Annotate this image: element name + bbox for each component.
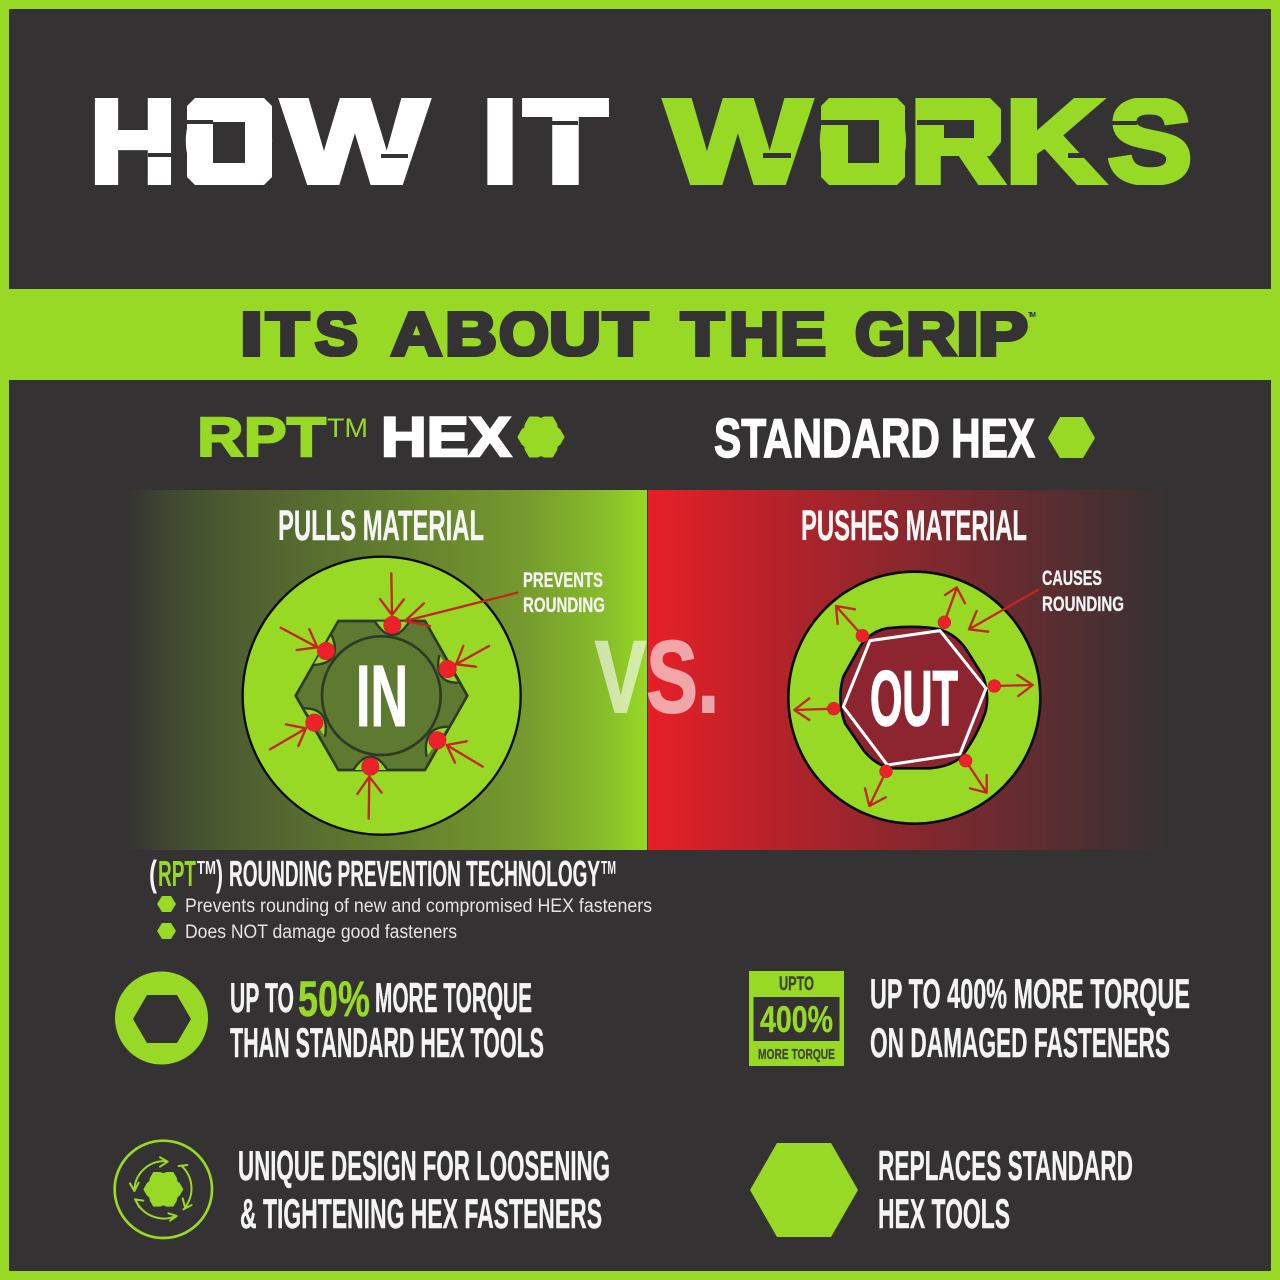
feature: replaces standard hex tools: HEX TOOLS: [878, 1190, 1010, 1237]
band lettering: U: [549, 300, 601, 369]
title white words: W: [283, 76, 428, 208]
band lettering: T: [266, 300, 309, 369]
band lettering: G: [855, 300, 905, 369]
icon: large hexagon: [750, 1143, 858, 1237]
heading: rpt hex: [197, 405, 564, 468]
band lettering: P: [978, 300, 1028, 369]
bullet list: Prevents rounding of new and compromised HEX fasteners: [185, 896, 652, 917]
icon: 400 percent badge: [749, 971, 844, 1066]
band: its about the grip: TM: [1028, 312, 1036, 319]
title green word: W: [666, 76, 811, 208]
heading: rounding prevention technology: RPT: [158, 853, 196, 894]
callout: causes rounding: ROUNDING: [1042, 593, 1124, 616]
diagram: standard socket: [788, 572, 1040, 824]
panel: standard pushes material: PUSHES MATERIAL: [801, 502, 1027, 550]
feature: loosening and tightening: [115, 1141, 610, 1238]
callout: causes rounding: [1042, 567, 1124, 616]
heading: standard hex: STANDARD HEX: [714, 407, 1035, 469]
title green word: R: [910, 76, 1004, 208]
heading: rpt hex: TM: [327, 413, 368, 443]
title white words: O: [184, 76, 274, 208]
band lettering: R: [906, 300, 956, 369]
icon: standard hexagon: [1048, 417, 1095, 458]
band lettering: B: [445, 300, 497, 369]
feature: 50% more torque: MORE TORQUE: [375, 974, 532, 1021]
icon: rotating gear: [115, 1141, 212, 1238]
title green word: [661, 98, 1190, 185]
title white words: T: [524, 76, 607, 208]
feature: 50% more torque: THAN STANDARD HEX TOOLS: [230, 1019, 544, 1066]
panel: standard pushes material: [648, 490, 1172, 850]
band lettering: O: [499, 300, 549, 369]
heading: rounding prevention technology: TM: [601, 858, 616, 878]
heading: rounding prevention technology: TM: [197, 858, 216, 878]
band lettering: I: [240, 300, 263, 369]
callout: prevents rounding: ROUNDING: [523, 594, 605, 617]
heading: rounding prevention technology: ROUNDING PREVENTION TECHNOLOGY: [229, 853, 600, 894]
feature: 50% more torque: UP TO: [230, 974, 294, 1021]
feature: loosening and tightening: & TIGHTENING HEX FASTENERS: [240, 1190, 602, 1237]
icon: hex socket ring: [115, 972, 208, 1064]
panel: rpt pulls material: PULLS MATERIAL: [278, 502, 484, 550]
feature: replaces standard hex tools: [750, 1142, 1133, 1237]
band lettering: [242, 311, 1028, 357]
band lettering: E: [780, 300, 826, 369]
heading: rounding prevention technology: (: [149, 853, 157, 894]
band lettering: S: [315, 300, 358, 369]
icon: rpt gear: [518, 417, 564, 457]
heading: rounding prevention technology: [149, 853, 616, 894]
feature: 50% more torque: [115, 971, 544, 1066]
bullet list: [157, 896, 652, 943]
band lettering: A: [391, 300, 442, 369]
title green word: K: [1005, 76, 1103, 208]
diagram: rpt socket: [243, 557, 521, 835]
versus label: VS.: [595, 620, 719, 734]
title green word: O: [818, 76, 908, 208]
band lettering: T: [681, 300, 724, 369]
title white words: H: [90, 76, 176, 208]
title white words: [94, 98, 609, 185]
title green word: S: [1108, 76, 1192, 208]
feature: loosening and tightening: UNIQUE DESIGN FOR LOOSENING: [238, 1142, 610, 1189]
title: how it works: [94, 98, 1190, 185]
bullet list: Does NOT damage good fasteners: [185, 922, 457, 943]
band lettering: H: [729, 300, 779, 369]
icon: 400 percent badge: MORE TORQUE: [758, 1046, 835, 1063]
heading: rounding prevention technology: ): [216, 853, 223, 894]
callout: prevents rounding: [523, 569, 605, 617]
title white words: I: [482, 76, 518, 208]
band lettering: I: [956, 300, 979, 369]
heading: rpt hex: HEX: [381, 405, 511, 468]
callout: causes rounding: CAUSES: [1042, 567, 1102, 590]
panel: rpt pulls material: [125, 490, 647, 850]
band lettering: T: [603, 300, 648, 369]
band: its about the grip: [0, 289, 1280, 380]
icon: 400 percent badge: UPTO: [779, 974, 814, 995]
heading: rpt hex: RPT: [197, 405, 326, 468]
feature: 400% more torque: [749, 970, 1190, 1066]
callout: prevents rounding: PREVENTS: [523, 569, 603, 592]
panel: rpt pulls material: IN: [356, 648, 408, 745]
icon: 400 percent badge: 400%: [760, 999, 833, 1040]
feature: 50% more torque: 50%: [298, 971, 370, 1027]
panel: standard pushes material: OUT: [870, 654, 958, 742]
